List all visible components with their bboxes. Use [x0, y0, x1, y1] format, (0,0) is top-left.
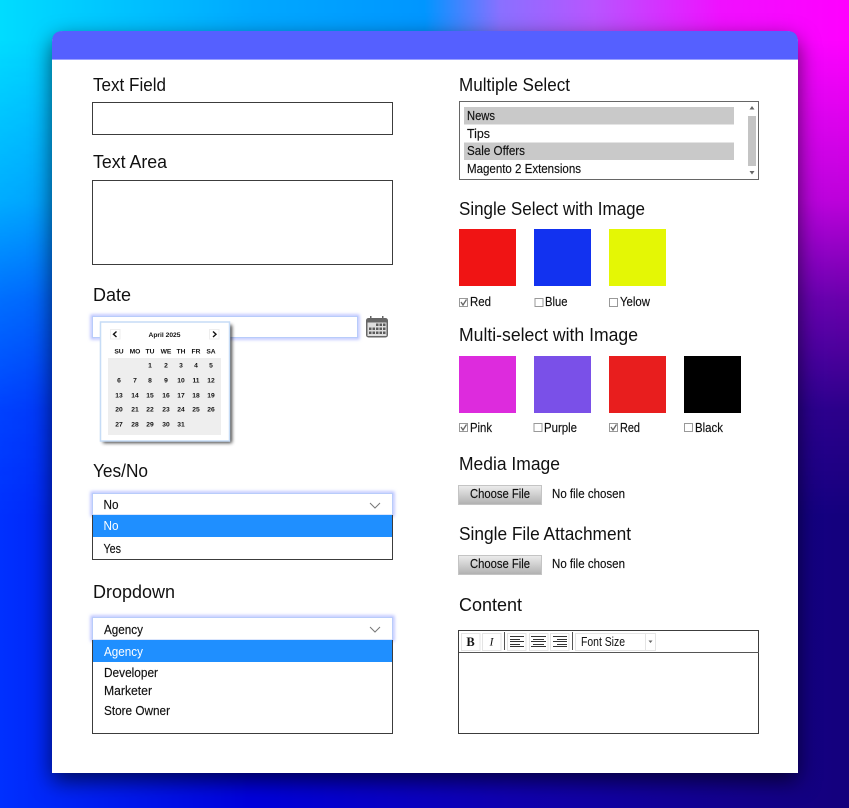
calendar grid: TH	[177, 348, 186, 356]
swatch: red: Red	[620, 421, 640, 435]
dropdown list: No	[104, 519, 119, 533]
editor toolbar: Font Size	[581, 635, 625, 649]
dropdown list	[92, 515, 392, 560]
card header bar	[52, 31, 798, 60]
select box: Agency	[104, 623, 144, 637]
swatch: blue: Blue	[545, 295, 568, 309]
calendar grid: 27	[115, 422, 123, 428]
field: text area	[92, 151, 392, 264]
calendar grid: 28	[131, 422, 139, 428]
dropdown list: Store Owner	[104, 704, 170, 718]
calendar grid: 14	[131, 392, 139, 400]
calendar grid: 22	[146, 406, 154, 414]
calendar grid: 25	[192, 406, 200, 414]
calendar grid	[108, 348, 221, 435]
file status: No file chosen	[552, 557, 625, 571]
heading: Yes/No: Yes/No	[93, 460, 148, 481]
field: content editor	[458, 594, 759, 734]
calendar grid: 20	[115, 406, 123, 414]
calendar grid: 3	[179, 362, 183, 370]
field: multiple select	[459, 74, 758, 180]
field: single select with image	[459, 198, 666, 309]
swatch: yellow	[609, 229, 666, 309]
swatch: pink	[459, 356, 516, 435]
calendar grid: 1	[148, 362, 152, 370]
dropdown list: Marketer	[104, 684, 152, 698]
calendar grid: SA	[206, 348, 216, 356]
list box: Tips	[467, 127, 490, 141]
heading: Dropdown: Dropdown	[93, 581, 175, 602]
calendar grid: 29	[146, 422, 154, 428]
swatch: red	[459, 229, 516, 309]
calendar grid: WE	[161, 348, 172, 356]
calendar grid: 21	[131, 406, 139, 414]
text area input	[92, 180, 392, 264]
date input	[92, 316, 358, 338]
heading: Multi-select with Image: Multi-select with Image	[459, 324, 638, 345]
calendar grid: 9	[164, 378, 168, 384]
heading: Date: Date	[93, 284, 131, 305]
file button	[458, 486, 542, 504]
icon: calendar	[366, 316, 388, 338]
select box: No	[104, 498, 119, 512]
calendar grid: 11	[192, 378, 200, 384]
select box	[92, 617, 393, 640]
calendar grid: 26	[207, 406, 215, 414]
field: text field	[92, 74, 392, 134]
calendar grid: 2	[164, 362, 168, 370]
calendar grid: 7	[133, 378, 137, 384]
calendar grid: 23	[162, 406, 170, 414]
file button: Choose File	[470, 557, 530, 571]
heading: Single File Attachment: Single File Attachment	[459, 523, 631, 544]
editor toolbar: I	[489, 636, 495, 648]
dropdown list: Agency	[104, 645, 144, 659]
calendar grid: 12	[207, 378, 215, 384]
calendar grid: SU	[114, 348, 124, 356]
dropdown list: Yes	[104, 542, 121, 556]
heading: Content: Content	[459, 594, 522, 615]
swatch: pink: Pink	[470, 421, 493, 435]
calendar grid: 30	[162, 422, 170, 428]
editor toolbar	[459, 632, 759, 652]
heading: Text Field: Text Field	[93, 74, 166, 95]
dropdown list: Developer	[104, 666, 158, 680]
list box: News	[467, 109, 495, 123]
file button	[458, 556, 542, 574]
swatch: black	[684, 356, 741, 435]
heading: Text Area: Text Area	[93, 151, 168, 172]
swatch: purple: Purple	[544, 421, 577, 435]
list box: Magento 2 Extensions	[467, 162, 581, 176]
select box	[92, 493, 393, 515]
date picker popup	[100, 322, 232, 443]
editor toolbar: B	[466, 635, 475, 649]
swatch: black: Black	[695, 421, 724, 435]
calendar grid: 19	[207, 392, 215, 400]
text input	[92, 102, 392, 134]
swatch: yellow: Yelow	[620, 295, 651, 309]
heading: Single Select with Image: Single Select with Image	[459, 198, 645, 219]
calendar grid: 15	[146, 392, 154, 400]
field: yes/no	[92, 460, 393, 560]
swatch: purple	[534, 356, 591, 435]
file button: Choose File	[470, 487, 530, 501]
calendar grid: 18	[192, 392, 200, 400]
swatch: red: Red	[470, 295, 491, 309]
calendar grid: 4	[194, 362, 198, 370]
calendar grid: 24	[177, 406, 185, 414]
swatch: blue	[534, 229, 591, 309]
field: dropdown	[92, 581, 393, 734]
month navigation: April 2025	[148, 332, 181, 339]
field: multi-select with image	[459, 324, 741, 435]
heading: Media Image: Media Image	[459, 453, 560, 474]
file status: No file chosen	[552, 487, 625, 501]
calendar grid: 6	[117, 378, 121, 384]
calendar grid: TU	[146, 348, 155, 356]
field: single file attachment	[458, 523, 631, 574]
calendar grid: 13	[115, 392, 123, 400]
list box: Sale Offers	[467, 144, 525, 158]
dropdown list	[92, 640, 392, 734]
calendar grid: FR	[192, 348, 201, 356]
field: date	[92, 284, 388, 443]
heading: Multiple Select: Multiple Select	[459, 74, 570, 95]
editor box	[458, 630, 758, 734]
calendar grid: 17	[177, 392, 185, 400]
calendar grid: 31	[177, 422, 185, 428]
calendar grid: MO	[130, 348, 140, 356]
calendar grid: 10	[177, 378, 185, 384]
calendar grid: 16	[162, 392, 170, 400]
list box	[460, 102, 758, 180]
field: media image	[458, 453, 625, 504]
calendar grid: 5	[209, 362, 213, 370]
swatch: red	[609, 356, 666, 435]
calendar grid: 8	[148, 378, 152, 384]
